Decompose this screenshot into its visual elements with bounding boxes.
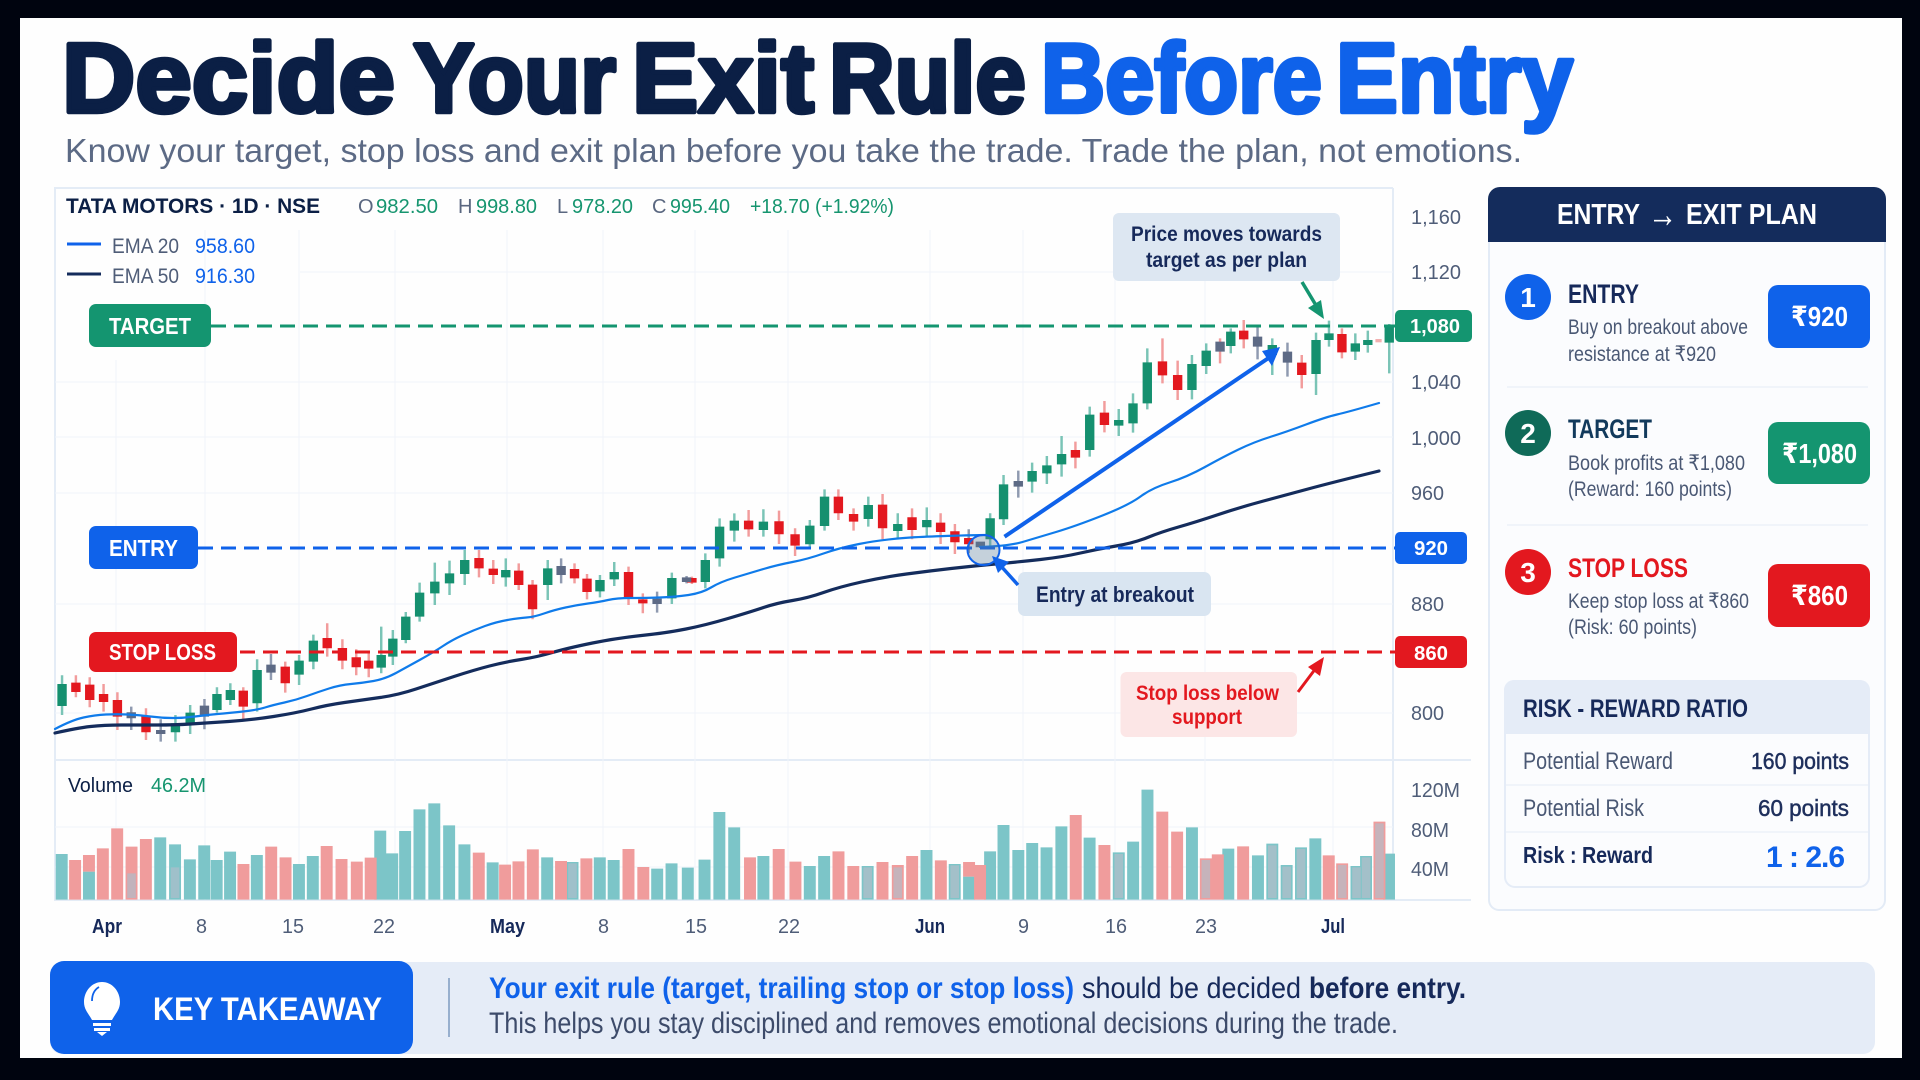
date axis labels: Apr — [92, 916, 122, 938]
volume axis labels — [1411, 780, 1460, 881]
risk reward table: RISK - REWARD RATIO — [1523, 695, 1748, 723]
key takeaway banner — [50, 961, 1875, 1054]
date axis labels: 8 — [196, 916, 207, 938]
plan header: → — [1648, 194, 1677, 236]
callout: stop loss below support: support — [1172, 705, 1242, 729]
volume axis labels: 120M — [1411, 780, 1460, 802]
date axis labels: 9 — [1018, 916, 1029, 938]
step 2: target: Book profits at ₹1,080 — [1568, 451, 1745, 475]
panel: price chart — [55, 188, 1472, 938]
candlesticks — [62, 320, 1389, 742]
volume bars — [62, 790, 1389, 900]
EMA legend: EMA 50 — [112, 265, 179, 288]
step 2: target — [1505, 410, 1870, 501]
price tag: 920: 920 — [1414, 538, 1448, 560]
chart header: symbol and OHLC: TATA MOTORS · 1D · NSE — [66, 195, 320, 218]
volume chart — [62, 775, 1460, 900]
title — [62, 23, 1573, 133]
price axis labels: 960 — [1411, 483, 1444, 505]
takeaway message — [489, 972, 1466, 1040]
price axis labels: 800 — [1411, 703, 1444, 725]
title: Decide — [62, 23, 395, 133]
key takeaway badge — [50, 961, 413, 1054]
plan header: ENTRY — [1557, 199, 1640, 231]
date axis labels: 15 — [685, 916, 707, 938]
step 1: entry: ₹920 — [1791, 301, 1848, 332]
EMA legend: EMA 20 — [112, 235, 179, 258]
title: Exit — [632, 23, 814, 133]
EMA 50 line — [55, 471, 1379, 733]
chart header: symbol and OHLC: +18.70 (+1.92%) — [750, 196, 894, 218]
EMA legend — [67, 235, 255, 288]
takeaway message: This helps you stay disciplined and removes emotional decisions during the trade. — [489, 1007, 1398, 1040]
volume label — [68, 775, 206, 797]
chart header: symbol and OHLC: H — [458, 196, 472, 218]
target level: pill and dashed line: TARGET — [109, 313, 192, 339]
date axis labels — [92, 916, 1345, 938]
price axis labels: 1,000 — [1411, 428, 1461, 450]
chart header: symbol and OHLC: 978.20 — [572, 196, 633, 218]
callout: entry at breakout — [1018, 572, 1211, 616]
date axis labels: 15 — [282, 916, 304, 938]
step 1: entry: Buy on breakout above — [1568, 315, 1748, 339]
EMA 20 line — [55, 403, 1379, 729]
price axis labels: 1,040 — [1411, 372, 1461, 394]
risk reward table: 160 points — [1751, 748, 1849, 774]
stop loss level: pill and dashed line: STOP LOSS — [109, 639, 216, 665]
price tag: 1,080 — [1395, 310, 1472, 342]
step 3: stop loss: 3 — [1520, 557, 1536, 588]
price axis labels: 880 — [1411, 594, 1444, 616]
key takeaway badge: KEY TAKEAWAY — [153, 991, 382, 1027]
date axis labels: Jul — [1321, 916, 1345, 938]
step 1: entry: resistance at ₹920 — [1568, 342, 1716, 366]
risk reward table: Potential Reward — [1523, 748, 1673, 775]
step 3: stop loss: ₹860 — [1791, 580, 1848, 611]
risk reward table: Risk : Reward — [1523, 842, 1653, 868]
chart header: symbol and OHLC: 995.40 — [670, 196, 730, 218]
panel: entry to exit plan — [1488, 187, 1886, 910]
step 2: target: ₹1,080 — [1782, 438, 1857, 469]
arrow: price move from entry to target — [1004, 347, 1280, 537]
entry level: pill and dashed line — [89, 526, 1395, 569]
price tag: 860 — [1395, 636, 1467, 668]
callout: stop loss below support: Stop loss below — [1136, 681, 1279, 705]
date axis labels: May — [490, 916, 526, 938]
chart header: symbol and OHLC: C — [652, 196, 666, 218]
price tag: 920 — [1395, 532, 1467, 564]
stop loss level: pill and dashed line — [89, 632, 1395, 672]
volume axis labels: 40M — [1411, 859, 1449, 881]
arrow: callout to entry point — [992, 556, 1018, 585]
title: Entry — [1336, 23, 1573, 133]
chart header: symbol and OHLC: 982.50 — [376, 196, 438, 218]
entry level: pill and dashed line: ENTRY — [109, 535, 178, 561]
arrow: callout to stop loss line — [1298, 657, 1324, 692]
step 3: stop loss: STOP LOSS — [1568, 553, 1688, 583]
arrow: callout to target line — [1302, 282, 1324, 319]
risk reward table — [1504, 680, 1870, 887]
callout: price moves towards target: Price moves towards — [1131, 223, 1322, 246]
step 3: stop loss: Keep stop loss at ₹860 — [1568, 589, 1749, 613]
target level: pill and dashed line — [89, 304, 1395, 347]
plan header — [1488, 187, 1886, 242]
risk reward table: 60 points — [1758, 795, 1849, 821]
callout: entry at breakout: Entry at breakout — [1036, 582, 1195, 607]
callout: price moves towards target — [1113, 213, 1340, 281]
EMA legend: 958.60 — [195, 235, 255, 258]
callout: stop loss below support — [1120, 672, 1297, 737]
date axis labels: 16 — [1105, 916, 1127, 938]
date axis labels: 22 — [373, 916, 395, 938]
risk reward table: 1 : 2.6 — [1766, 841, 1845, 874]
chart header: symbol and OHLC: O — [358, 196, 374, 218]
chart header: symbol and OHLC: L — [557, 196, 568, 218]
chart header: symbol and OHLC — [66, 195, 894, 218]
date axis labels: 22 — [778, 916, 800, 938]
price axis labels: 1,120 — [1411, 262, 1461, 284]
step 2: target: (Reward: 160 points) — [1568, 477, 1732, 501]
price tag: 1,080: 1,080 — [1410, 316, 1460, 338]
callout: price moves towards target: target as per plan — [1146, 249, 1307, 272]
date axis labels: 23 — [1195, 916, 1217, 938]
takeaway message: Your exit rule (target, trailing stop or stop loss) — [489, 972, 1074, 1005]
entry marker circle — [968, 535, 1000, 565]
price tag: 860: 860 — [1414, 643, 1448, 665]
step 3: stop loss: (Risk: 60 points) — [1568, 615, 1697, 639]
step 1: entry — [1505, 274, 1870, 366]
volume axis labels: 80M — [1411, 820, 1449, 842]
date axis labels: Jun — [915, 916, 945, 938]
EMA legend: 916.30 — [195, 265, 255, 288]
title: Rule — [829, 23, 1026, 133]
step 3: stop loss — [1505, 549, 1870, 639]
title: Your — [413, 23, 616, 133]
step 1: entry: 1 — [1520, 282, 1536, 313]
date axis labels: 8 — [598, 916, 609, 938]
chart header: symbol and OHLC: 998.80 — [476, 196, 537, 218]
step 2: target: TARGET — [1568, 414, 1652, 444]
risk reward table: Potential Risk — [1523, 795, 1645, 822]
plan header: EXIT PLAN — [1686, 199, 1817, 231]
volume label: 46.2M — [151, 775, 206, 797]
takeaway message: before entry. — [1309, 972, 1466, 1005]
price axis labels — [1411, 207, 1461, 725]
title: Before — [1041, 23, 1322, 133]
icon: light bulb — [84, 982, 120, 1036]
step 2: target: 2 — [1520, 418, 1536, 449]
takeaway message: should be decided — [1082, 972, 1301, 1005]
subtitle: Know your target, stop loss and exit plan before you take the trade. Trade the plan, not emotions. — [65, 133, 1522, 170]
price axis labels: 1,160 — [1411, 207, 1461, 229]
step 1: entry: ENTRY — [1568, 279, 1639, 309]
volume label: Volume — [68, 775, 133, 797]
